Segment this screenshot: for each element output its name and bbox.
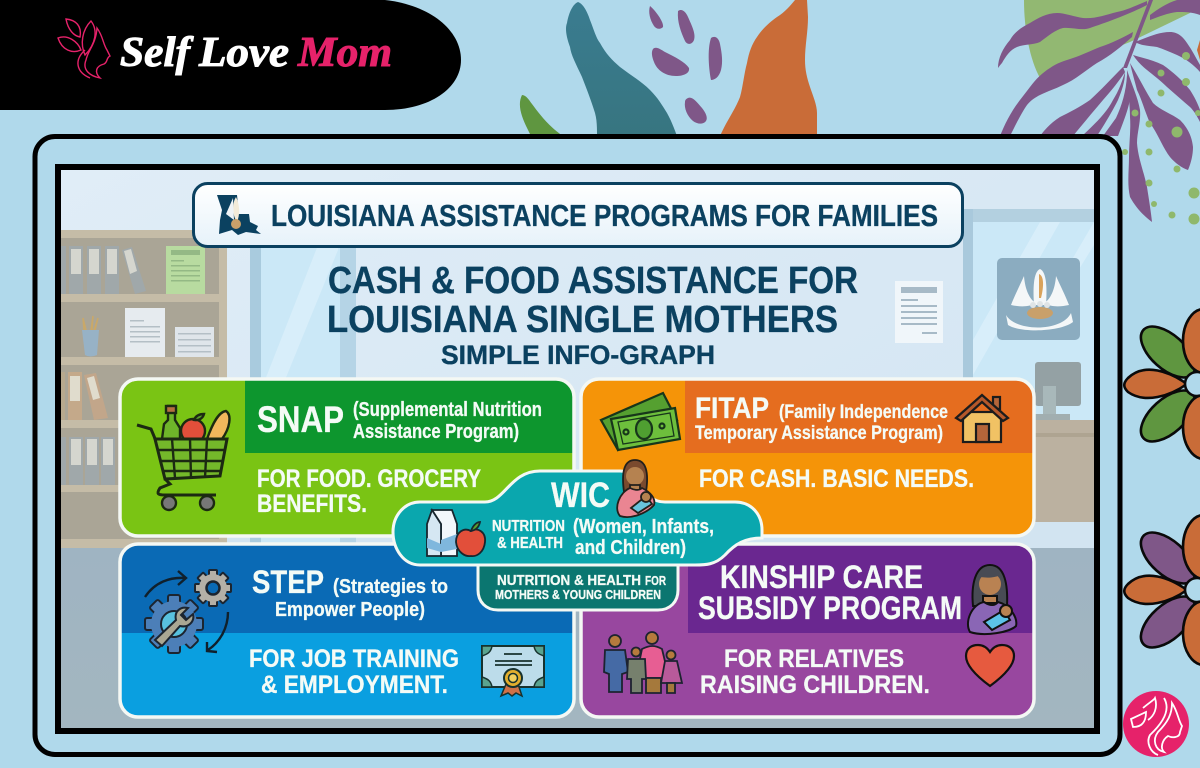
icon: apple (456, 522, 485, 556)
STEP heading: STEP (252, 564, 324, 600)
panel: FITAP (581, 379, 1034, 536)
panel: Kinship Care: SUBSIDY PROGRAM (698, 590, 962, 626)
panel: SNAP: Assistance Program) (353, 421, 519, 443)
panel: WIC (393, 460, 762, 610)
logo wordmark: Self (120, 30, 194, 76)
WIC sub tab: FOR (645, 574, 666, 588)
STEP description: FOR JOB TRAINING (249, 645, 459, 673)
icon: gears and wrench (145, 570, 231, 653)
office background image (61, 170, 1094, 728)
icon: family (604, 632, 682, 693)
icon: mother and baby (968, 565, 1016, 634)
logo wordmark (120, 30, 392, 76)
FITAP description: FOR CASH. BASIC NEEDS. (699, 465, 974, 493)
panel: Kinship Care: RAISING CHILDREN. (700, 671, 930, 699)
SNAP heading: SNAP (257, 399, 344, 440)
WIC sub tab (478, 560, 678, 610)
main heading (327, 260, 858, 370)
circular logo badge (1123, 691, 1189, 757)
logo wordmark: Mom (297, 30, 392, 76)
panel: FITAP: Temporary Assistance Program) (695, 423, 943, 444)
background decorative leaves (520, 0, 1200, 224)
panel: STEP: & EMPLOYMENT. (261, 671, 448, 699)
panel: SNAP: (Supplemental Nutrition (353, 399, 542, 421)
panel: WIC: NUTRITION (492, 518, 565, 535)
main heading: CASH & FOOD ASSISTANCE FOR (328, 260, 858, 302)
icon: milk carton (427, 510, 457, 556)
decorative flower top (1124, 309, 1200, 459)
WIC text: WIC (551, 476, 610, 515)
logo wordmark: Love (198, 30, 289, 76)
icon: certificate (482, 646, 544, 696)
panel: WIC: and Children) (575, 537, 686, 559)
panel: Kinship Care (581, 544, 1034, 717)
Kinship description: FOR RELATIVES (724, 645, 904, 673)
SNAP description: FOR FOOD. GROCERY (257, 465, 481, 493)
window left (250, 248, 356, 542)
icon: Louisiana state shape (217, 195, 261, 235)
WIC sub tab: MOTHERS & YOUNG CHILDREN (495, 588, 661, 602)
panel: WIC: (Women, Infants, (573, 516, 714, 538)
panel: STEP: (Strategies to (333, 576, 448, 598)
WIC main shape (393, 471, 762, 565)
main heading: LOUISIANA SINGLE MOTHERS (327, 299, 838, 341)
panel: STEP (120, 544, 574, 717)
banner text: LOUISIANA ASSISTANCE PROGRAMS FOR FAMILIES (271, 198, 938, 233)
decorative flower bottom (1124, 515, 1200, 665)
Kinship heading: KINSHIP CARE (720, 559, 923, 595)
panel: WIC: & HEALTH (497, 535, 563, 552)
icon: house (956, 395, 1008, 442)
window right (963, 209, 1094, 429)
FITAP heading: FITAP (695, 392, 769, 425)
panel: STEP: Empower People) (275, 599, 425, 621)
title banner (194, 184, 962, 246)
bookshelf (61, 230, 227, 548)
panel: FITAP: (Family Independence (779, 402, 948, 423)
icon: heart (966, 645, 1014, 686)
WIC sub tab: NUTRITION & HEALTH (497, 572, 641, 589)
main heading: SIMPLE INFO-GRAPH (441, 340, 715, 370)
desk (1035, 362, 1094, 522)
panel: SNAP (120, 379, 574, 536)
icon: money (601, 393, 680, 450)
icon: mother and baby (617, 460, 654, 517)
wall document (895, 281, 943, 343)
icon: shopping cart (137, 406, 229, 510)
icon: logo face and leaves (58, 19, 110, 78)
state flag plaque with pelican (997, 258, 1080, 340)
outer frame (35, 136, 1120, 754)
logo banner (0, 0, 461, 110)
inner image border (58, 167, 1097, 731)
panel: SNAP: BENEFITS. (257, 490, 367, 518)
